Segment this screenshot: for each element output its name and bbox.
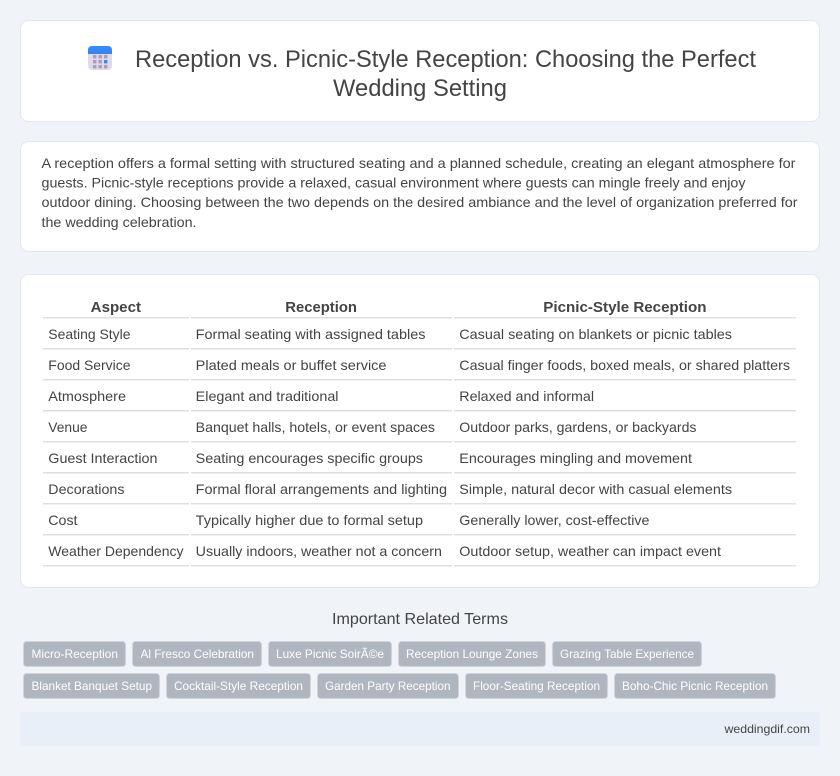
tag: Cocktail-Style Reception	[166, 674, 310, 698]
table header: Aspect	[91, 299, 141, 316]
tag: Floor-Seating Reception: Floor-Seating Reception	[473, 679, 600, 693]
intro text: the wedding celebration.	[42, 214, 196, 230]
row: food service: Casual finger foods, boxed meals, or shared platters	[459, 357, 790, 373]
row: food service	[48, 357, 790, 373]
row: cost: Cost	[48, 512, 78, 528]
intro text: outdoor dining. Choosing between the two depends on the desired ambiance and the level of organization preferred for	[42, 194, 798, 210]
panel: header	[20, 20, 820, 122]
row: weather dependency: Weather Dependency	[48, 543, 183, 559]
row: food service: Food Service	[48, 357, 131, 373]
row: cost	[48, 512, 650, 528]
tag: Garden Party Reception	[318, 674, 458, 698]
tag: Luxe Picnic Soirée: Luxe Picnic SoirÃ©e	[276, 647, 384, 661]
tag: Micro-Reception: Micro-Reception	[32, 647, 118, 661]
panel: introduction	[20, 142, 820, 252]
intro text	[42, 155, 798, 230]
tag: Grazing Table Experience	[552, 642, 702, 666]
tag: Luxe Picnic Soirée	[268, 642, 392, 666]
tag: Reception Lounge Zones: Reception Lounge Zones	[406, 647, 538, 661]
row: guest interaction: Guest Interaction	[48, 450, 157, 466]
row: atmosphere: Atmosphere	[48, 388, 126, 404]
panel: comparison table	[20, 274, 820, 588]
tag: Blanket Banquet Setup: Blanket Banquet Setup	[32, 679, 152, 693]
row: decorations	[48, 481, 732, 497]
row: venue: Banquet halls, hotels, or event spaces	[196, 419, 435, 435]
icon: calendar	[88, 46, 112, 70]
footer: weddingdif.com	[723, 722, 810, 736]
intro text: A reception offers a formal setting with structured seating and a planned schedule, creating an elegant atmosphere for	[42, 155, 796, 171]
tag: Floor-Seating Reception	[466, 674, 608, 698]
row: decorations: Simple, natural decor with casual elements	[459, 481, 732, 497]
row: guest interaction: Encourages mingling and movement	[459, 450, 692, 466]
row: guest interaction	[48, 450, 692, 466]
row: seating style: Casual seating on blankets or picnic tables	[459, 326, 732, 342]
row: food service: Plated meals or buffet service	[196, 357, 387, 373]
tag: Boho-Chic Picnic Reception	[614, 674, 776, 698]
footer	[20, 712, 820, 746]
row: seating style: Formal seating with assigned tables	[196, 326, 426, 342]
row: venue	[48, 419, 697, 435]
row: atmosphere	[48, 388, 594, 404]
tag: Al Fresco Celebration	[132, 642, 262, 666]
table grid lines	[43, 317, 796, 566]
tag: Micro-Reception	[24, 642, 126, 666]
table header: Picnic-Style Reception	[543, 299, 706, 316]
row: venue: Venue	[48, 419, 88, 435]
tag: Grazing Table Experience: Grazing Table Experience	[560, 647, 694, 661]
tag: Garden Party Reception: Garden Party Reception	[325, 679, 450, 693]
row: decorations: Decorations	[48, 481, 124, 497]
row: guest interaction: Seating encourages specific groups	[196, 450, 423, 466]
row: atmosphere: Elegant and traditional	[196, 388, 338, 404]
tag: Boho-Chic Picnic Reception: Boho-Chic Picnic Reception	[622, 679, 768, 693]
row: cost: Generally lower, cost-effective	[459, 512, 650, 528]
row: weather dependency	[48, 543, 721, 559]
row: venue: Outdoor parks, gardens, or backyards	[459, 419, 696, 435]
row: cost: Typically higher due to formal setup	[196, 512, 423, 528]
tag: Reception Lounge Zones	[398, 642, 546, 666]
title: Wedding Setting	[333, 75, 507, 102]
row: decorations: Formal floral arrangements and lighting	[196, 481, 447, 497]
row: seating style	[48, 326, 732, 342]
title: Reception vs. Picnic-Style Reception: Choosing the Perfect	[135, 46, 756, 73]
tag: Cocktail-Style Reception: Cocktail-Style Reception	[174, 679, 303, 693]
panel: related term tags	[24, 642, 776, 698]
row: atmosphere: Relaxed and informal	[459, 388, 594, 404]
title	[135, 46, 756, 102]
row: seating style: Seating Style	[48, 326, 131, 342]
tag: Al Fresco Celebration: Al Fresco Celebration	[140, 647, 254, 661]
row: weather dependency: Usually indoors, weather not a concern	[196, 543, 442, 559]
table header	[91, 299, 706, 316]
table header: Reception	[285, 299, 357, 316]
heading: important related terms: Important Related Terms	[332, 611, 508, 628]
intro text: guests. Picnic-style receptions provide a relaxed, casual environment where guests can mingle freely and enjoy	[42, 175, 746, 191]
tag: Blanket Banquet Setup	[24, 674, 160, 698]
row: weather dependency: Outdoor setup, weather can impact event	[459, 543, 721, 559]
